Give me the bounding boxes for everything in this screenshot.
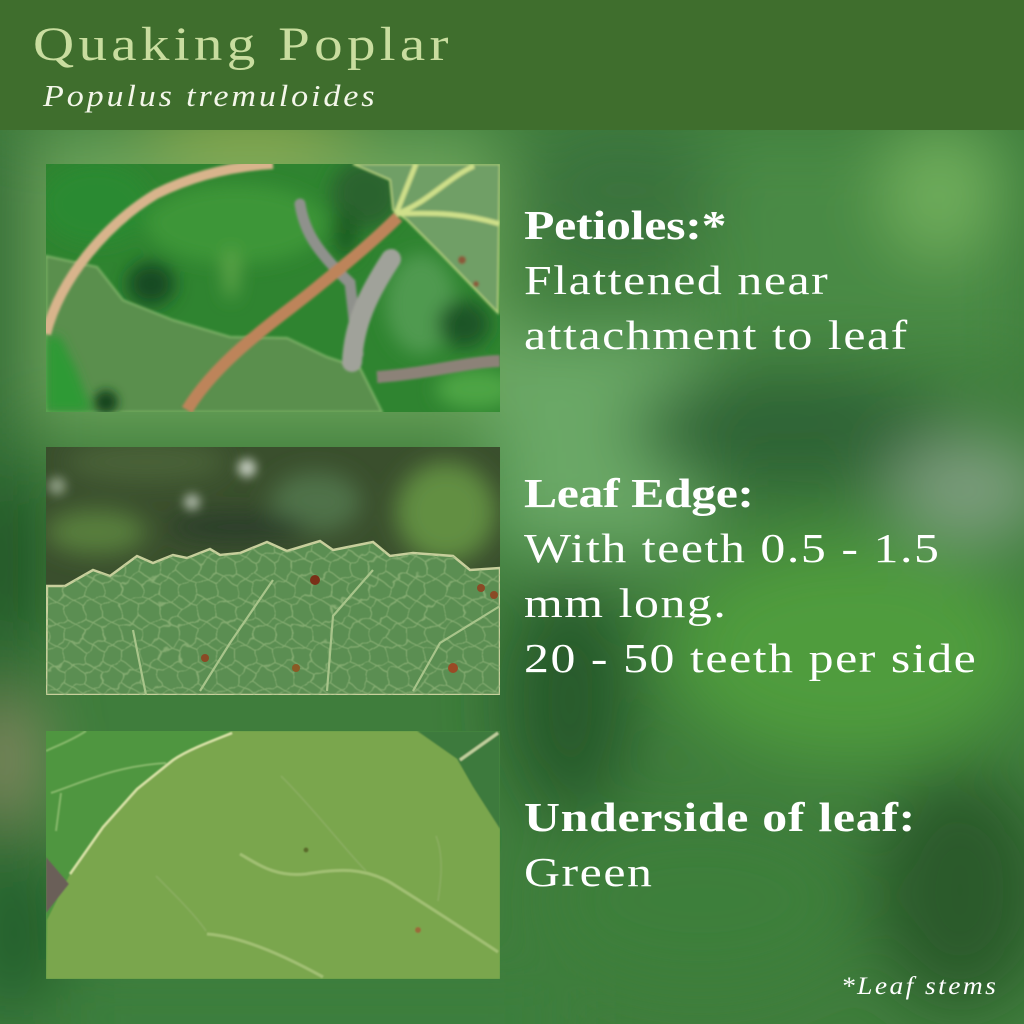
text: leaf edge: With teeth 0.5 - 1.5	[524, 525, 940, 571]
text: leaf edge: Leaf Edge:	[524, 470, 754, 516]
text: underside: Green	[524, 849, 653, 895]
photo: leaf edge	[46, 447, 500, 695]
title: Quaking Poplar	[33, 19, 453, 71]
text: petioles: Petioles:*	[524, 202, 726, 248]
text: petioles: attachment to leaf	[524, 312, 909, 358]
text: underside	[524, 794, 916, 895]
photo: petioles	[46, 164, 500, 412]
text: leaf edge: mm long.	[524, 580, 727, 626]
text: leaf edge	[524, 470, 977, 681]
header band	[0, 0, 1024, 130]
footnote: *Leaf stems	[841, 973, 998, 1000]
photo: underside of leaf	[46, 731, 500, 979]
subtitle: Populus tremuloides	[43, 78, 377, 113]
text: petioles	[524, 202, 909, 358]
text: petioles: Flattened near	[524, 257, 829, 303]
text: leaf edge: 20 - 50 teeth per side	[524, 635, 977, 681]
text: underside: Underside of leaf:	[524, 794, 916, 840]
